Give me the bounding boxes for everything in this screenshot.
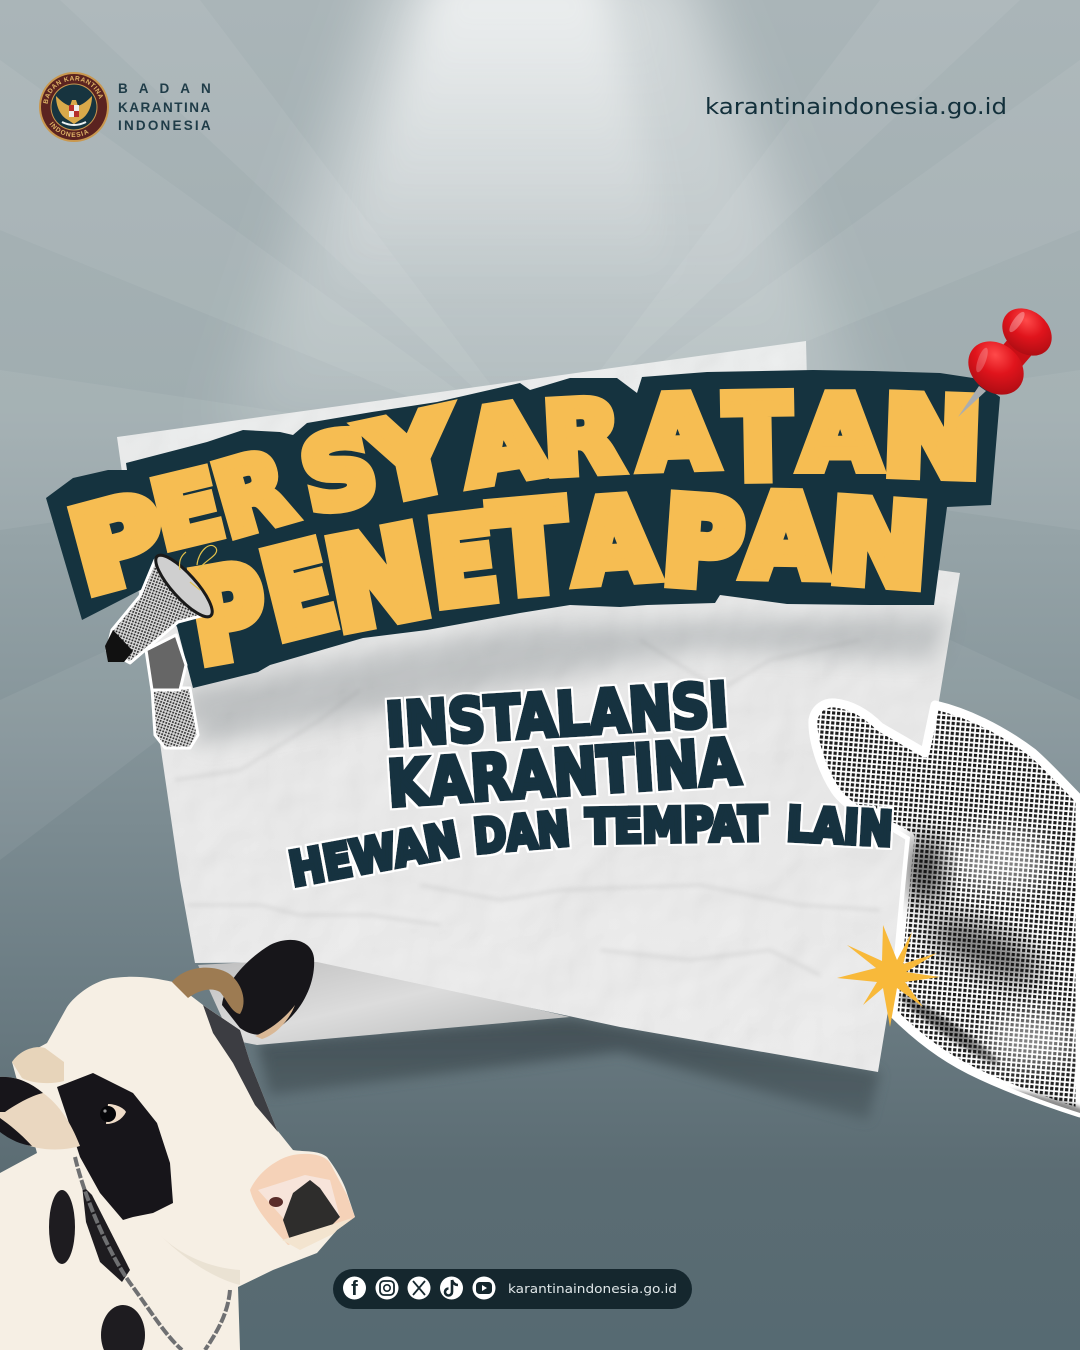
title: Persyaratan Penetapan: N [825,477,933,614]
subtitle: Instalansi Karantina Hewan dan Tempat Lain: TEMPAT [585,797,767,855]
title: Persyaratan Penetapan [46,370,1000,691]
title: Persyaratan Penetapan: E [422,492,504,633]
title: Persyaratan Penetapan: A [637,375,718,493]
title: Persyaratan Penetapan: T [487,476,572,624]
title: Persyaratan Penetapan: R [203,429,303,560]
logo: Badan Karantina Indonesia [39,72,222,142]
title: Persyaratan Penetapan: P [659,473,748,615]
eye [100,1104,126,1124]
logo wordmark: KARANTINA [118,100,212,115]
ear left [0,1077,80,1149]
title: Persyaratan Penetapan: A [743,471,829,603]
icon: halftone megaphone [105,545,220,748]
subtitle: Instalansi Karantina Hewan dan Tempat Lain [285,670,894,898]
ear right [222,940,314,1039]
logo emblem [39,72,109,142]
footer: social media pill [333,1269,692,1309]
title: Persyaratan Penetapan: S [292,407,386,536]
icon: youtube [472,1276,496,1300]
title: Persyaratan Penetapan: E [143,451,232,571]
title: Persyaratan Penetapan: A [801,375,880,492]
cow head and body [0,977,355,1350]
logo emblem: INDONESIA [50,122,89,137]
title: Persyaratan Penetapan: N [881,373,984,502]
icon: yellow burst star [837,925,940,1027]
subtitle: Instalansi Karantina Hewan dan Tempat Lain: INSTALANSI [384,670,730,761]
horn left stub [12,1047,64,1083]
title: Persyaratan Penetapan: E [251,518,348,667]
subtitle: Instalansi Karantina Hewan dan Tempat Lain: HEWAN [285,813,464,898]
icon: red push pin [958,299,1061,417]
icon: facebook: f [351,1278,358,1300]
icon: tiktok [440,1276,463,1300]
title: Persyaratan Penetapan: T [724,372,791,505]
title: Persyaratan Penetapan: R [541,380,624,497]
title: Persyaratan Penetapan: Y [354,386,469,527]
title: Persyaratan Penetapan: N [317,501,441,659]
website address header: karantinaindonesia.go.id [705,94,1007,120]
subtitle: Instalansi Karantina Hewan dan Tempat Lain: LAIN [785,797,894,857]
icon: instagram [376,1276,398,1300]
cow markings [49,1005,355,1350]
logo emblem: BADAN KARANTINA [43,76,103,104]
icon: facebook [343,1276,366,1300]
spotlight beam [220,0,880,440]
icon: halftone pointing hand [813,703,1080,1125]
footer website address: karantinaindonesia.go.id [508,1281,677,1296]
title: Persyaratan Penetapan: P [180,539,278,691]
logo wordmark: BADAN [118,81,222,96]
panel: crumpled white paper [117,341,960,1072]
cow [0,940,355,1350]
subtitle: Instalansi Karantina Hewan dan Tempat Lain: DAN [471,803,572,865]
panel: fold underside of paper [198,958,880,1120]
logo wordmark [118,81,222,133]
icon: X [408,1276,430,1300]
title: Persyaratan Penetapan: A [569,473,660,609]
title: Persyaratan Penetapan: A [455,381,553,509]
title: Persyaratan Penetapan: P [58,468,179,619]
horn right [172,968,244,1014]
chain collar [75,1157,230,1350]
logo wordmark: INDONESIA [118,118,213,133]
subtitle: Instalansi Karantina Hewan dan Tempat Lain: KARANTINA [385,725,742,821]
